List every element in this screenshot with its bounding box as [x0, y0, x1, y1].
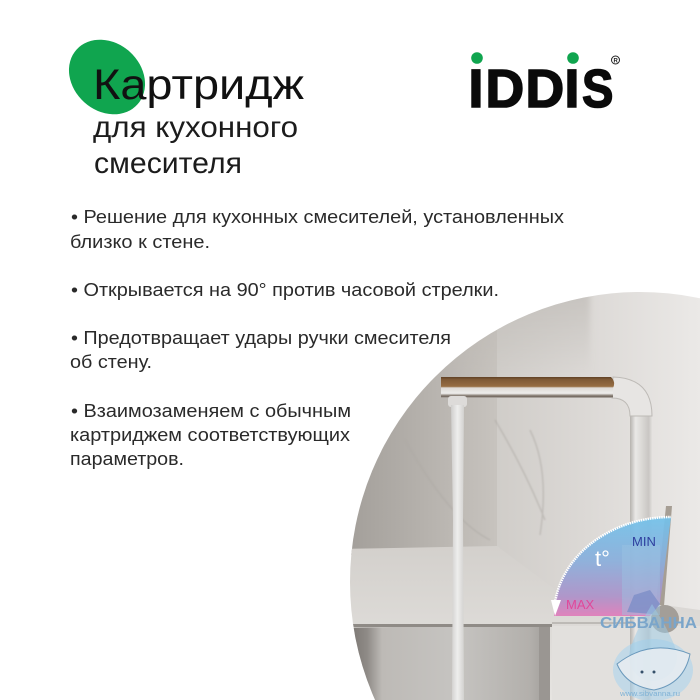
watermark: СИБВАННА — [600, 604, 697, 700]
icon: green title blob — [54, 24, 160, 130]
panel: circular kitchen photo — [340, 285, 700, 700]
wall right — [497, 285, 700, 625]
text block: feature list: картриджем соответствующих — [70, 424, 351, 445]
text block: feature list: параметров. — [70, 448, 184, 469]
counter — [340, 546, 700, 700]
label: MIN: MIN — [632, 534, 656, 549]
subtitle: смесителя — [94, 147, 242, 180]
lower right counter — [552, 626, 700, 700]
text block: feature list: • Взаимозаменяем с обычным — [71, 400, 351, 421]
subtitle — [93, 111, 298, 180]
label: t°: t° — [595, 546, 610, 571]
text block: feature list: • Решение для кухонных смесителей, установленных — [71, 206, 565, 227]
watermark: СИБВАННА: СИБВАННА — [600, 615, 697, 632]
text block: feature list: об стену. — [70, 351, 152, 372]
text block: feature list: близко к стене. — [70, 231, 210, 252]
faucet handle — [651, 605, 679, 633]
logo: IDDIS: R — [614, 58, 618, 64]
faucet elbow — [612, 377, 652, 416]
faucet vertical — [630, 412, 652, 700]
marble veins — [480, 420, 546, 540]
title: Картридж — [93, 61, 304, 109]
logo: IDDIS: S — [582, 58, 613, 119]
wall left — [351, 328, 500, 555]
arrow — [551, 600, 561, 616]
text block: feature list: • Открывается на 90° против часовой стрелки. — [71, 279, 499, 300]
logo: IDDIS: I — [564, 60, 579, 119]
subtitle: для кухонного — [93, 111, 298, 144]
sink — [354, 627, 539, 700]
logo: IDDIS: D — [526, 60, 564, 119]
logo: IDDIS — [468, 52, 620, 119]
top shade — [499, 296, 591, 344]
text block: feature list — [70, 206, 565, 469]
logo: IDDIS: I — [468, 60, 483, 119]
aerator and water stream — [448, 396, 467, 700]
label: MAX: MAX — [566, 597, 594, 612]
chart: temperature fan — [551, 517, 671, 616]
logo: IDDIS: D — [486, 60, 524, 119]
watermark: СИБВАННА: www.sibvanna.ru — [619, 691, 680, 698]
faucet spout — [441, 377, 614, 398]
text block: feature list: • Предотвращает удары ручки смесителя — [71, 327, 451, 348]
